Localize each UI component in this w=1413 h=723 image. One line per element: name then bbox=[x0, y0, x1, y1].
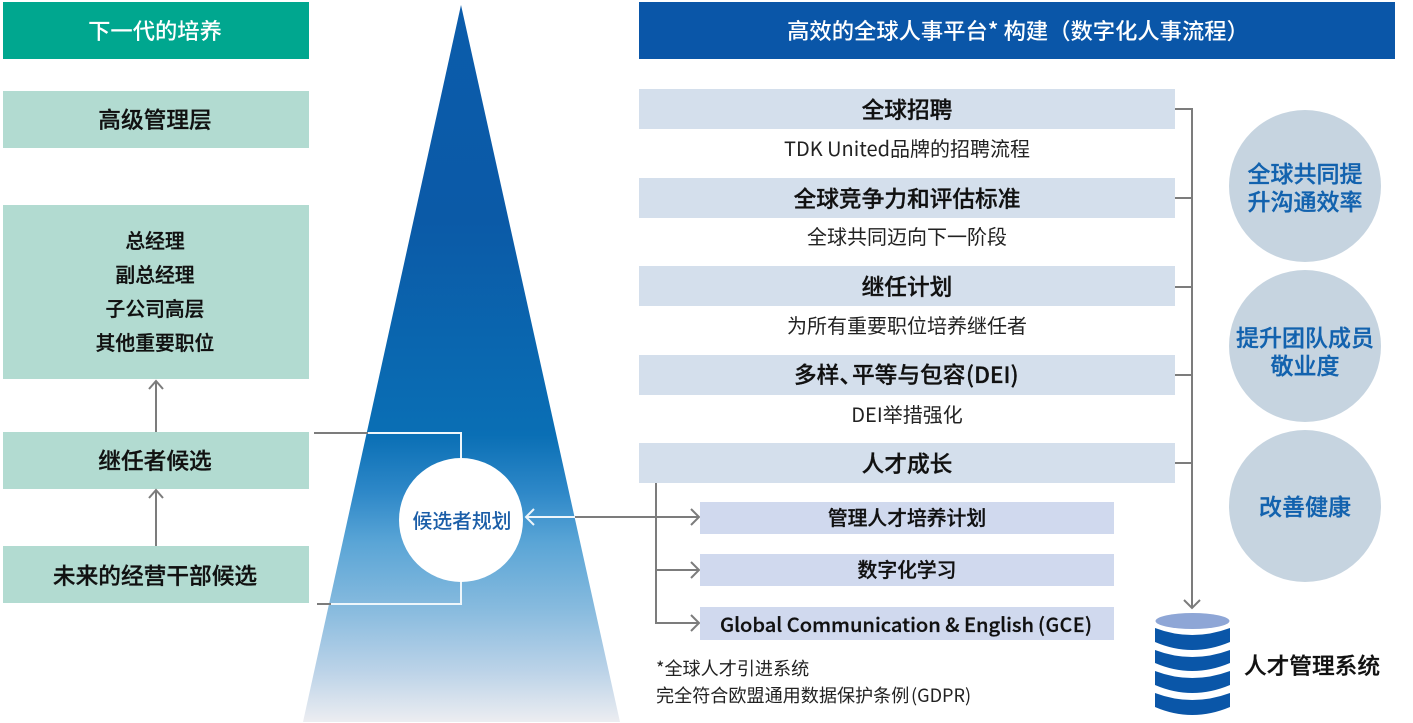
circle: engagement bbox=[1229, 270, 1381, 422]
item: succession planning: 为所有重要职位培养继任者 bbox=[787, 310, 1027, 339]
pyramid bbox=[303, 5, 620, 722]
footnote: *全球人才引进系统 bbox=[656, 655, 809, 681]
box: key positions: 副总经理 bbox=[115, 259, 195, 288]
connector to talent management system bbox=[1175, 109, 1200, 608]
right header: global HR platform bbox=[639, 2, 1395, 59]
sub-item: management talent programme: 管理人才培养计划 bbox=[828, 502, 986, 531]
label: talent management system: 人才管理系统 bbox=[1244, 648, 1380, 681]
box: senior management bbox=[3, 91, 309, 148]
circle: communication efficiency: 全球共同提 bbox=[1248, 155, 1362, 189]
circle: communication efficiency: 升沟通效率 bbox=[1248, 183, 1362, 217]
box: successor candidates: 继任者候选 bbox=[98, 443, 212, 476]
box: future executive candidates: 未来的经营干部候选 bbox=[53, 558, 257, 591]
sub-item: digital learning: 数字化学习 bbox=[858, 554, 956, 583]
sub-item: digital learning bbox=[700, 554, 1114, 586]
circle: engagement: 提升团队成员 bbox=[1236, 319, 1374, 353]
item: global competency and assessment: 全球竞争力和评估标准 bbox=[794, 181, 1020, 214]
double-headed arrow: planning to management programme bbox=[526, 509, 699, 525]
box: key positions: 其他重要职位 bbox=[96, 327, 214, 356]
sub-item: management talent programme bbox=[700, 502, 1114, 534]
box: senior management: 高级管理层 bbox=[98, 102, 212, 135]
item: global recruiting bbox=[639, 89, 1175, 162]
item: DEI: (DEI) bbox=[966, 357, 1019, 390]
circle: wellbeing bbox=[1229, 430, 1381, 582]
circle: wellbeing: 改善健康 bbox=[1259, 488, 1351, 522]
arrow: future candidates to successors bbox=[149, 490, 163, 546]
item: DEI: 平等与包容 bbox=[852, 357, 965, 390]
sub-item: GCE bbox=[700, 607, 1114, 640]
item: global recruiting: TDK United品牌的招聘流程 bbox=[784, 133, 1030, 162]
item: DEI bbox=[639, 355, 1175, 428]
box: successor candidates bbox=[3, 432, 309, 489]
item: global competency and assessment: 全球共同迈向下一阶段 bbox=[807, 221, 1007, 250]
left header: next generation development bbox=[3, 2, 309, 59]
item: DEI: 多样、 bbox=[794, 357, 862, 390]
box: future executive candidates bbox=[3, 546, 309, 603]
right header: global HR platform: 高效的全球人事平台* 构建（数字化人事流程） bbox=[787, 14, 1249, 46]
box: key positions bbox=[3, 205, 309, 379]
circle: engagement: 敬业度 bbox=[1270, 347, 1340, 381]
sub-item: GCE: Global Communication & English bbox=[720, 609, 1034, 638]
arrow: successor to key positions bbox=[149, 381, 163, 432]
box: key positions: 子公司高层 bbox=[106, 293, 204, 322]
item: DEI: DEI举措强化 bbox=[851, 399, 963, 428]
footnote: 完全符合欧盟通用数据保护条例 bbox=[656, 682, 909, 708]
talent growth branch arrows bbox=[656, 483, 699, 631]
box: key positions: 总经理 bbox=[125, 225, 185, 254]
item: global competency and assessment bbox=[639, 178, 1175, 250]
footnote bbox=[656, 655, 971, 708]
icon: database bbox=[1155, 613, 1230, 715]
circle: communication efficiency bbox=[1229, 110, 1381, 262]
footnote: (GDPR) bbox=[911, 682, 971, 708]
item: succession planning: 继任计划 bbox=[862, 269, 952, 302]
item: global recruiting: 全球招聘 bbox=[862, 92, 952, 125]
item: succession planning bbox=[639, 266, 1175, 339]
left header: next generation development: 下一代的培养 bbox=[88, 14, 222, 46]
item: talent growth: 人才成长 bbox=[862, 446, 952, 479]
circle: candidate planning bbox=[399, 458, 523, 582]
circle: candidate planning: 候选者规划 bbox=[413, 505, 511, 534]
sub-item: GCE: (GCE) bbox=[1038, 609, 1092, 638]
item: talent growth bbox=[639, 443, 1175, 483]
bracket connecting candidates to planning circle bbox=[314, 433, 461, 604]
